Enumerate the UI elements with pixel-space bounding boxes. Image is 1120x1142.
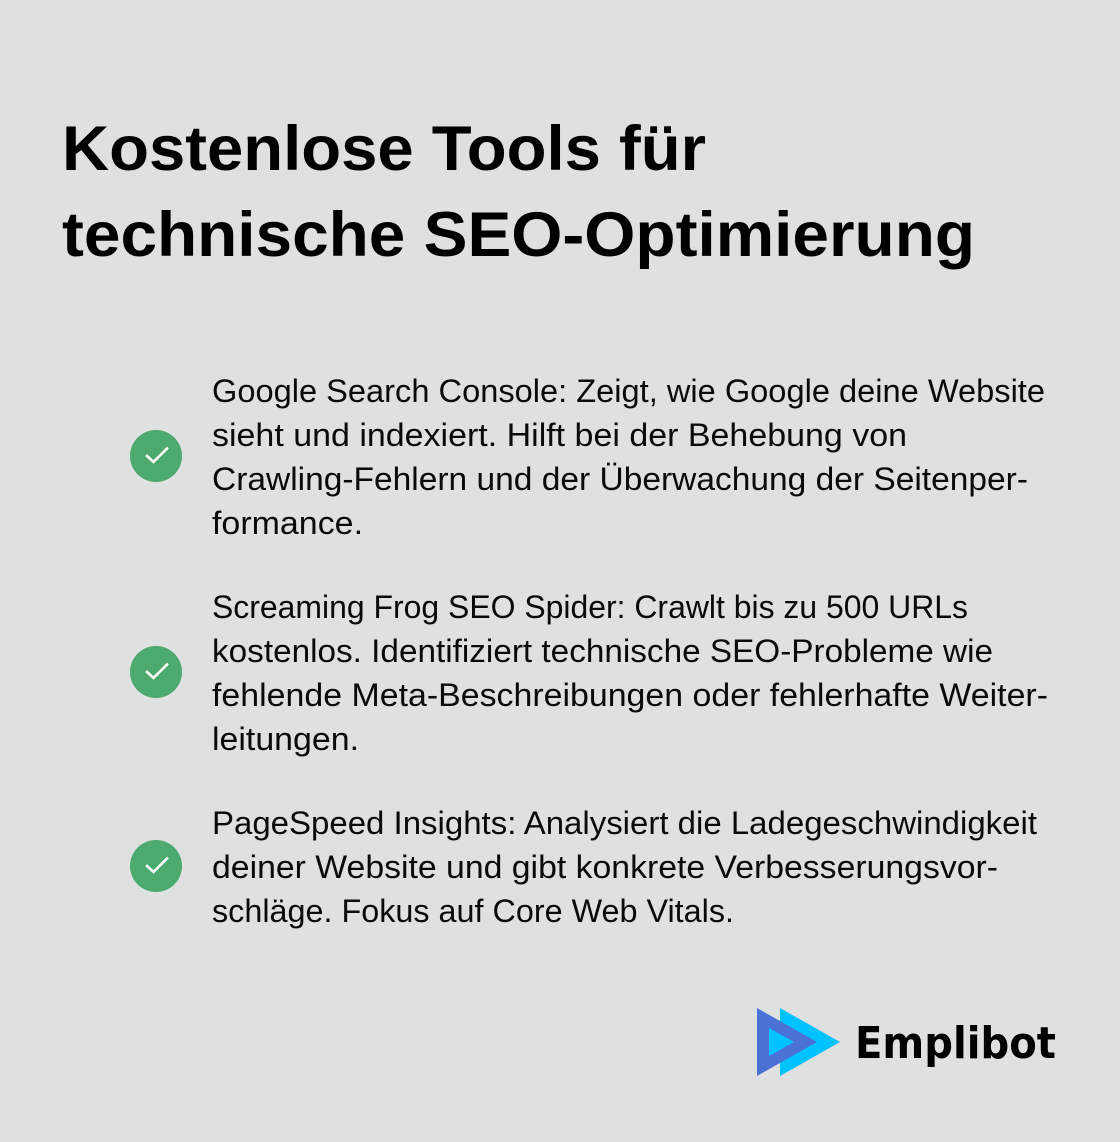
text block: Google Search Console [212, 373, 1045, 541]
title [62, 114, 975, 270]
text block: Screaming Frog SEO Spider: Screaming Frog SEO Spider: Crawlt bis zu 500 URLs [212, 589, 968, 625]
icon: check mark [130, 430, 182, 482]
text block: PageSpeed Insights: PageSpeed Insights: Analysiert die Ladegeschwindigkeit [212, 805, 1037, 841]
text block: PageSpeed Insights: deiner Website und gibt konkrete Verbesserungsvor- [212, 849, 998, 885]
text block: Google Search Console: formance. [212, 505, 363, 541]
list item: Google Search Console [130, 373, 1045, 541]
icon: check mark [130, 840, 182, 892]
text block: Screaming Frog SEO Spider: kostenlos. Identifiziert technische SEO-Probleme wie [212, 633, 993, 669]
wordmark: Emplibot [855, 1018, 1056, 1069]
text block: PageSpeed Insights [212, 805, 1037, 929]
text block: PageSpeed Insights: schläge. Fokus auf Core Web Vitals. [212, 893, 734, 929]
text block: Google Search Console: Google Search Console: Zeigt, wie Google deine Website [212, 373, 1045, 409]
title: technische SEO-Optimierung [62, 200, 975, 270]
list item: PageSpeed Insights [130, 805, 1037, 929]
text block: Screaming Frog SEO Spider: fehlende Meta-Beschreibungen oder fehlerhafte Weiter- [212, 677, 1048, 713]
text block: Google Search Console: Crawling-Fehlern und der Überwachung der Seitenper- [212, 461, 1028, 497]
icon: check mark [130, 646, 182, 698]
text block: Screaming Frog SEO Spider: leitungen. [212, 721, 359, 757]
logo: Emplibot [757, 1008, 1056, 1076]
text block: Screaming Frog SEO Spider [212, 589, 1048, 757]
text block: Google Search Console: sieht und indexiert. Hilft bei der Behebung von [212, 417, 907, 453]
icon: play triangles [757, 1008, 840, 1076]
list item: Screaming Frog SEO Spider [130, 589, 1048, 757]
title: Kostenlose Tools für [62, 114, 706, 184]
